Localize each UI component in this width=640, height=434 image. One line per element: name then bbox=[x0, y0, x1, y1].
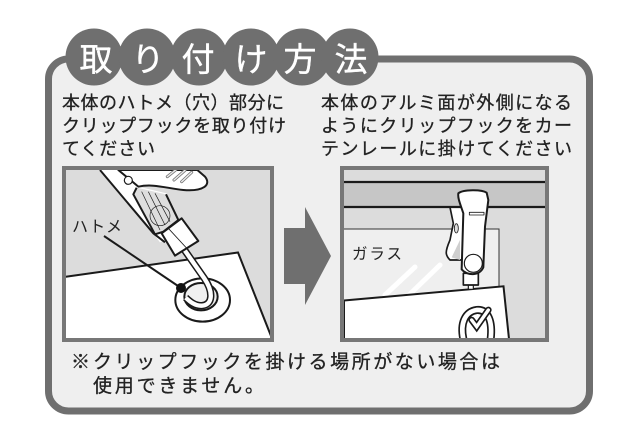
text: left instruction bbox=[62, 93, 286, 159]
title: installation method: り bbox=[132, 41, 164, 78]
label line to eyelet bbox=[104, 236, 186, 293]
frame: right illustration bbox=[342, 168, 547, 340]
title: installation method bbox=[66, 28, 378, 86]
note: usage warning bbox=[71, 347, 500, 397]
text: left instruction: 本体のハトメ（穴）部分に bbox=[62, 93, 284, 113]
curtain rail band bbox=[344, 182, 547, 207]
panel: main frame bbox=[48, 59, 590, 411]
note: usage warning: クリップフックを掛ける場所がない場合は bbox=[93, 351, 500, 373]
glass glare bbox=[385, 265, 440, 295]
text: right instruction bbox=[321, 93, 572, 159]
rail clip bbox=[446, 190, 488, 289]
note: usage warning: 使用できません。 bbox=[93, 375, 264, 397]
note: usage warning: ※ bbox=[71, 347, 90, 374]
text: left instruction: クリップフックを取り付け bbox=[62, 116, 286, 136]
text: right instruction: 本体のアルミ面が外側になる bbox=[321, 93, 572, 113]
text: right instruction: テンレールに掛けてください bbox=[321, 139, 572, 159]
hook on sheet bbox=[462, 310, 491, 339]
illustration: left, hook through eyelet bbox=[64, 168, 272, 340]
curtain sheet bbox=[344, 286, 509, 339]
text: right instruction: ようにクリップフックをカー bbox=[321, 116, 572, 136]
frame: left illustration bbox=[64, 168, 272, 340]
sheet of paper bbox=[64, 252, 271, 340]
title: installation method: 取 bbox=[80, 41, 112, 78]
label: eyelet: ハトメ bbox=[72, 219, 122, 236]
title: installation method: 法 bbox=[334, 41, 368, 78]
window glass bbox=[344, 229, 499, 300]
title: installation method: 方 bbox=[284, 41, 316, 78]
title: installation method: 付 bbox=[182, 41, 214, 78]
eyelet and hook bbox=[175, 248, 230, 322]
illustration: right, clip on curtain rail bbox=[342, 168, 547, 340]
metal clip bbox=[100, 170, 207, 256]
label: glass: ガラス bbox=[352, 245, 402, 263]
text: left instruction: てください bbox=[62, 139, 155, 159]
title: installation method: け bbox=[234, 41, 268, 78]
arrow bbox=[284, 207, 331, 305]
